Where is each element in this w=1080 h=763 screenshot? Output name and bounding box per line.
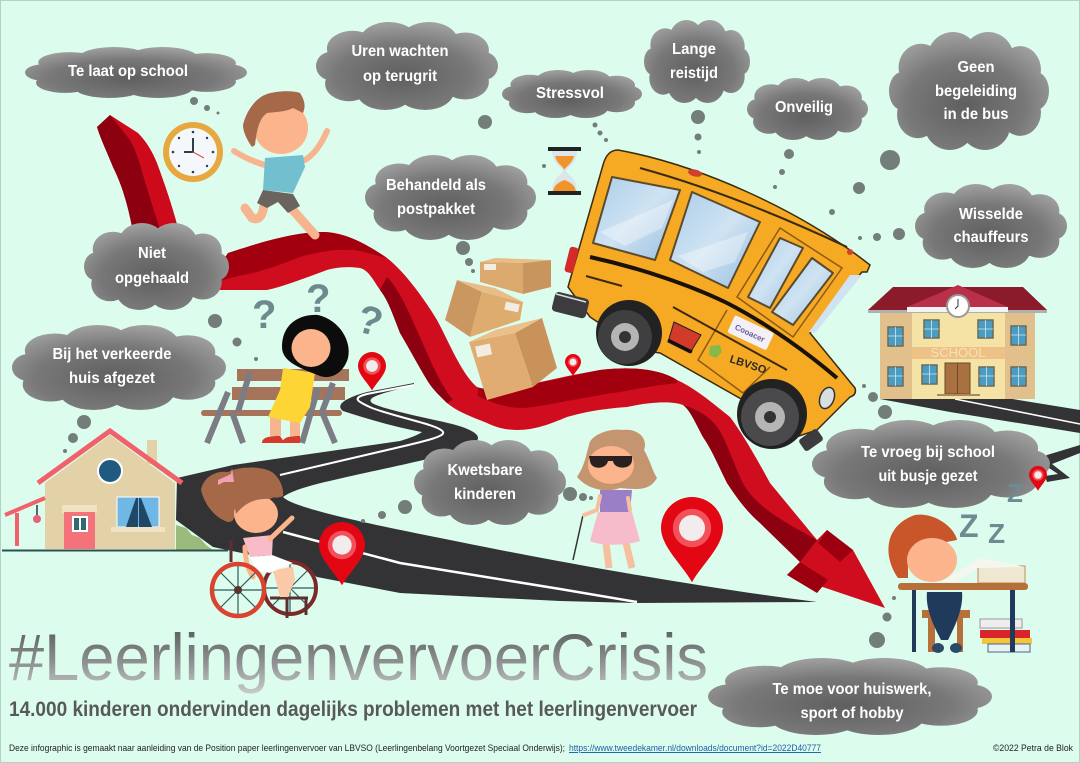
cloud: Te moe voor huiswerk: Te moe voor huiswerk,: [772, 681, 932, 698]
door window left: [748, 238, 803, 308]
boxes: [445, 258, 557, 400]
character: running boy: [234, 91, 327, 235]
cloud: Lange reistijd: reistijd: [670, 65, 718, 82]
character: girl on bench: [201, 315, 349, 443]
footer source note: Deze infographic is gemaakt naar aanleiding van de Position paper leerlingenvervoer van LBVSO (Leerlingenbelang Voortgezet Speciaal Onderwijs);: [9, 743, 565, 754]
cloud: Geen begeleiding: [889, 32, 1049, 150]
thought dots: Te vroeg: [862, 384, 892, 419]
box: middle: [445, 280, 482, 337]
thought dots: Behandeld: [456, 241, 475, 273]
thought dots: Stressvol: [542, 122, 608, 168]
cloud: Geen begeleiding: Geen: [958, 59, 994, 76]
cloud: Uren wachten: [316, 22, 498, 110]
cloud: Te moe voor huiswerk: sport of hobby: [800, 705, 904, 722]
cloud: Wisselde chauffeurs: Wisselde: [959, 206, 1023, 223]
icon: map pin school road: [1029, 466, 1047, 491]
sleep letters: Z: [959, 508, 979, 544]
cloud: Kwetsbare kinderen: Kwetsbare: [448, 462, 523, 479]
middle window: [670, 192, 760, 288]
cloud: Niet opgehaald: Niet: [138, 245, 167, 262]
icon: map pin on road: [319, 522, 365, 585]
school windows: [888, 320, 1026, 386]
road: to school: [880, 397, 1080, 482]
character: girl in wheelchair: [201, 468, 316, 618]
door window right: [772, 258, 833, 325]
sleep letters: Z: [1007, 478, 1023, 508]
rear bumper: [551, 291, 590, 319]
thought dots: Wisselde: [858, 228, 905, 241]
cloud: Te vroeg bij school: uit busje gezet: [878, 468, 978, 485]
rear window: [593, 177, 680, 260]
question marks: ?: [252, 293, 276, 337]
cloud: Te laat op school: [25, 47, 247, 98]
bus body: [568, 150, 870, 438]
windshield: [809, 275, 862, 333]
cloud: Te laat op school: Te laat op school: [68, 63, 188, 80]
thought dots: Kwetsbare: [361, 487, 593, 523]
cloud: Geen begeleiding: begeleiding: [935, 83, 1017, 100]
arrow main ribbon: [210, 232, 885, 608]
footer link: https://www.tweedekamer.nl/downloads/document?id=2022D40777: [569, 743, 821, 754]
cloud: Bij het verkeerde huis afgezet: [12, 325, 226, 410]
floor books: [980, 619, 1032, 652]
thought dots: Uren: [478, 115, 492, 129]
thought dots: Bij het: [63, 415, 91, 453]
thought dots: Niet: [208, 314, 258, 361]
cloud: Uren wachten: Uren wachten: [352, 43, 448, 60]
ribbon shaded band 3: [478, 368, 677, 408]
icon: map pin near bench: [358, 352, 386, 390]
hair: [201, 468, 283, 522]
thought dots: Te moe: [869, 596, 896, 648]
arrow start segment: [97, 115, 178, 232]
character: sleeping child at desk: [888, 515, 1032, 653]
copyright: ©2022 Petra de Blok: [993, 743, 1073, 754]
cloud: Te vroeg bij school: Te vroeg bij school: [861, 444, 995, 461]
cloud: Onveilig: [747, 78, 868, 140]
arrow head shaded parts: [787, 530, 853, 593]
icon: hourglass: [548, 147, 581, 195]
front wheel: [737, 379, 807, 449]
red arrow: winding ribbon: [97, 115, 885, 608]
sleep letters: Z: [988, 518, 1005, 549]
icon: small map pin: [565, 354, 581, 376]
tail light: [564, 246, 579, 274]
cloud: Wisselde chauffeurs: chauffeurs: [954, 229, 1029, 246]
shirt: [243, 535, 273, 557]
cloud: Onveilig: Onveilig: [775, 99, 833, 116]
cloud: Behandeld als postpakket: Behandeld als: [386, 177, 486, 194]
ribbon shaded band 2: [380, 277, 453, 403]
thought dots: Geen: [829, 150, 900, 215]
road: winding road from house: [176, 383, 817, 603]
label logo: Cooacer: [733, 323, 766, 344]
cloud: Lange reistijd: [644, 20, 750, 103]
icon: clock: [163, 122, 223, 182]
school building: [868, 285, 1047, 399]
window lattice: [888, 320, 1026, 386]
headlight: [817, 385, 837, 411]
rear wheel: [596, 300, 662, 366]
ribbon shaded band 1: [205, 232, 387, 285]
legs and skirt: [273, 567, 295, 597]
ribbon shaded band 4: [683, 405, 817, 562]
question marks: ?: [306, 277, 330, 321]
cloud: Bij het verkeerde huis afgezet: Bij het verkeerde: [52, 346, 172, 363]
cloud: Stressvol: Stressvol: [536, 85, 604, 102]
question marks: [252, 277, 387, 346]
cloud: Behandeld als postpakket: postpakket: [397, 201, 476, 218]
title: #LeerlingenvervoerCrisis: [9, 620, 708, 694]
thought dots: Lange: [691, 110, 705, 154]
cloud: Lange reistijd: Lange: [672, 41, 716, 58]
subtitle: 14.000 kinderen ondervinden dagelijks problemen met het leerlingenvervoer: [9, 697, 698, 721]
front wheel: [212, 564, 264, 616]
door frame: [698, 228, 842, 393]
cloud: Niet opgehaald: [84, 223, 229, 310]
box: top: [480, 262, 523, 294]
cloud: Te vroeg bij school: [812, 420, 1050, 508]
LBVSO logo: LBVSO: [728, 353, 768, 377]
sleep letters: [959, 478, 1023, 549]
character: blind girl with cane: [573, 430, 657, 568]
cloud: Kwetsbare kinderen: kinderen: [454, 486, 516, 503]
cloud: Stressvol: [502, 70, 642, 118]
cloud: Geen begeleiding: in de bus: [944, 106, 1009, 123]
LBVSO logo: [709, 345, 768, 377]
school bus: [551, 150, 870, 452]
bench: [201, 369, 349, 416]
cloud: Te moe voor huiswerk: [708, 658, 992, 735]
thought dots: Te laat: [190, 97, 220, 114]
house: [2, 431, 228, 550]
cloud: Bij het verkeerde huis afgezet: huis afgezet: [69, 370, 156, 387]
crest logo: [668, 322, 701, 353]
cloud: Uren wachten: op terugrit: [363, 68, 438, 85]
rear wheel: [264, 562, 316, 614]
cloud: Wisselde chauffeurs: [915, 184, 1067, 268]
bus stripes: [590, 257, 837, 378]
thought dots: Onveilig: [773, 149, 794, 189]
front bumper: [798, 428, 824, 452]
cloud: Behandeld als postpakket: [365, 155, 536, 240]
cloud: Niet opgehaald: opgehaald: [115, 270, 189, 287]
cloud: Kwetsbare kinderen: [414, 440, 566, 525]
label logo: [727, 315, 774, 350]
school building: SCHOOL: [931, 345, 985, 360]
box: front: [469, 333, 533, 400]
question marks: ?: [352, 297, 387, 346]
icon: large map pin: [661, 497, 723, 582]
roof markers: [687, 168, 853, 255]
